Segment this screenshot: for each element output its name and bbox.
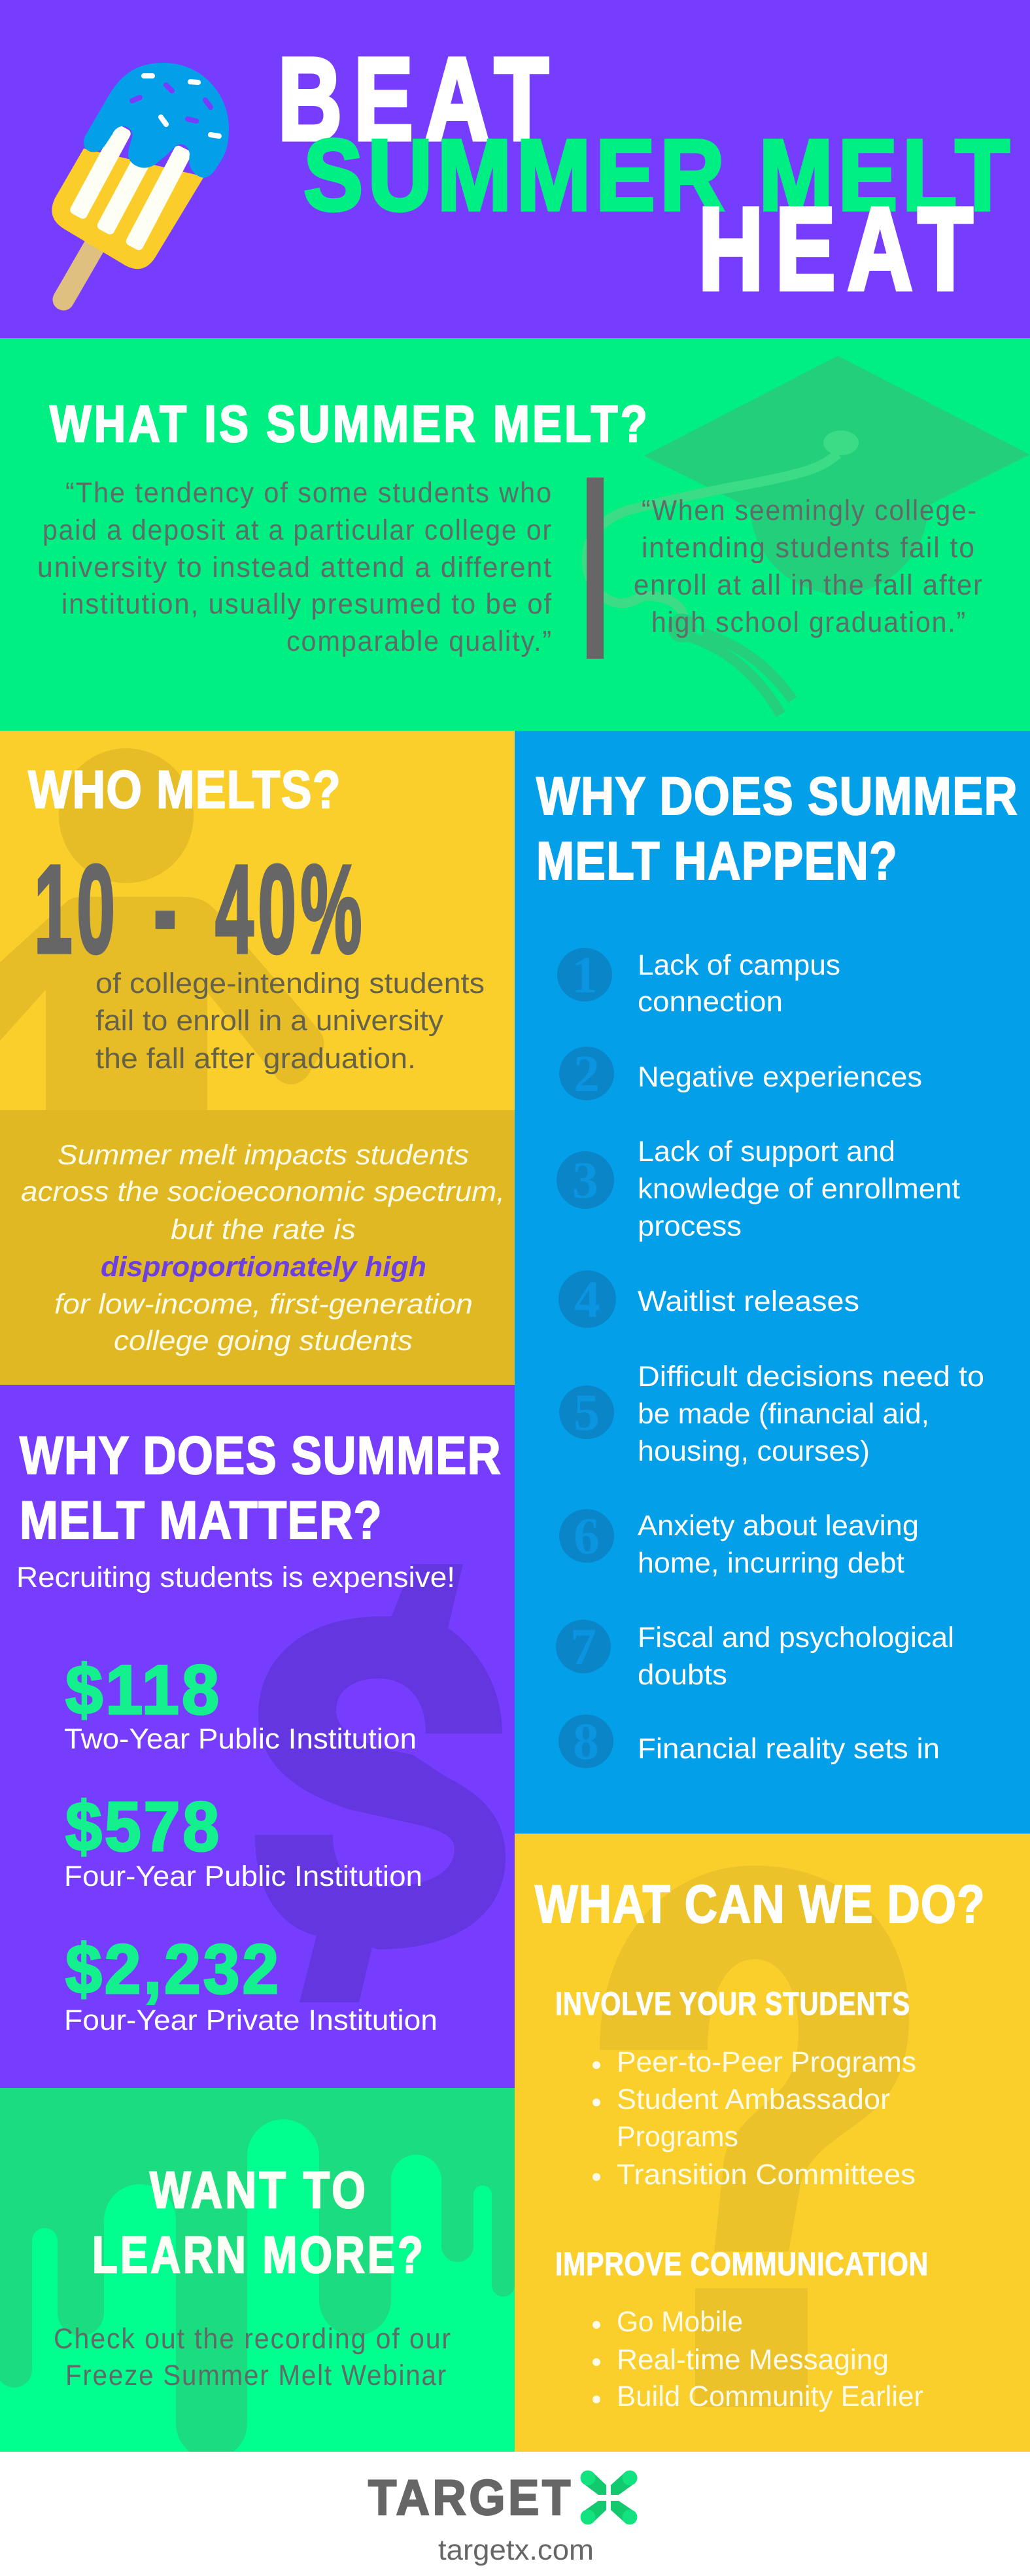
- icon: dollar sign watermark: [255, 1564, 506, 2002]
- list item 3: process: [638, 1210, 742, 1242]
- subheading: involve your students: INVOLVE YOUR STUDENTS: [555, 1985, 910, 2022]
- panel: why does summer melt matter: [0, 1385, 515, 2088]
- list item 3: knowledge of enrollment: [638, 1173, 960, 1205]
- list item 7: 7: [570, 1618, 596, 1676]
- heading: why does summer melt happen: MELT HAPPEN?: [536, 831, 898, 891]
- list item 8: [558, 1713, 940, 1771]
- quote: right definition: intending students fail to: [642, 532, 976, 564]
- list item 4: Waitlist releases: [638, 1285, 859, 1317]
- text: impact callout: for low-income, first-generation: [54, 1289, 473, 1320]
- text: webinar prompt: Check out the recording of our: [54, 2323, 452, 2355]
- list item 2: [559, 1045, 922, 1103]
- list item 4: 4: [574, 1271, 600, 1329]
- title: beat: BEAT: [278, 33, 560, 164]
- list item 8: 8: [573, 1713, 599, 1771]
- text: stat description: fail to enroll in a university: [95, 1005, 443, 1037]
- list item 7: Fiscal and psychological: [638, 1622, 954, 1654]
- list: involve students: Student Ambassador: [617, 2083, 890, 2115]
- icon: targetx X logo: [581, 2470, 637, 2525]
- panel: who melts: [0, 731, 515, 1385]
- list item 8: Financial reality sets in: [638, 1733, 940, 1765]
- icon: graduation cap watermark: [587, 356, 1030, 714]
- quote: left definition: university to instead attend a different: [37, 551, 553, 583]
- text: website: targetx.com: [438, 2534, 594, 2566]
- list item 6: home, incurring debt: [638, 1547, 904, 1579]
- list item 6: 6: [574, 1508, 600, 1565]
- list: involve students: Peer-to-Peer Programs: [617, 2046, 916, 2078]
- list: improve communication: Real-time Messaging: [617, 2344, 889, 2376]
- stat: four-year public: [64, 1787, 422, 1892]
- panel: title header: [0, 0, 1030, 338]
- icon: person watermark: [0, 748, 324, 1110]
- quote: right definition: enroll at all in the fall after: [634, 569, 984, 601]
- heading: why does summer melt matter: WHY DOES SUMMER: [20, 1426, 502, 1486]
- text: webinar prompt: [54, 2323, 452, 2392]
- list: involve students: Programs: [617, 2121, 738, 2153]
- drips background: [0, 2119, 515, 2460]
- list: involve students: [592, 2046, 916, 2191]
- quote: right definition: [634, 495, 984, 638]
- list item 5: [559, 1361, 984, 1467]
- text: stat description: the fall after graduation.: [95, 1043, 416, 1075]
- divider bar: [587, 478, 604, 659]
- heading: why does summer melt happen: [536, 767, 1018, 891]
- band: dark yellow callout: [0, 1110, 515, 1385]
- stat: two-year public: $118: [65, 1650, 222, 1729]
- stat: two-year public: Two-Year Public Institution: [64, 1723, 417, 1755]
- heading: want to learn more: LEARN MORE?: [92, 2225, 426, 2284]
- list item 5: housing, courses): [638, 1435, 870, 1467]
- list item 5: Difficult decisions need to: [638, 1361, 984, 1393]
- heading: what is summer melt: WHAT IS SUMMER MELT?: [50, 394, 650, 453]
- panel: what is summer melt: [0, 338, 1030, 731]
- list item 2: Negative experiences: [638, 1061, 922, 1093]
- list item 1: 1: [572, 947, 598, 1004]
- panel: what can we do: [515, 1834, 1030, 2452]
- stat: two-year public: [64, 1650, 417, 1755]
- heading: want to learn more: [92, 2161, 426, 2284]
- list: improve communication: Go Mobile: [617, 2306, 743, 2338]
- quote: right definition: “When seemingly college-: [642, 495, 978, 527]
- text: stat description: [95, 967, 485, 1075]
- list item 3: 3: [572, 1152, 598, 1210]
- text: stat description: of college-intending students: [95, 967, 485, 1000]
- list item 1: connection: [638, 986, 783, 1018]
- quote: left definition: “The tendency of some students who: [65, 477, 553, 509]
- quote: left definition: comparable quality.”: [286, 625, 553, 657]
- icon: melting popsicle: [52, 63, 229, 300]
- text: impact callout: disproportionately high: [101, 1251, 426, 1283]
- quote: right definition: high school graduation.”: [651, 606, 967, 638]
- text: impact callout: college going students: [114, 1325, 413, 1357]
- list: improve communication: Build Community Earlier: [617, 2380, 923, 2412]
- list item 7: doubts: [638, 1659, 727, 1691]
- panel: want to learn more: [0, 2088, 515, 2460]
- list item 3: Lack of support and: [638, 1136, 895, 1168]
- heading: who melts: WHO MELTS?: [28, 760, 341, 820]
- quote: left definition: institution, usually presumed to be of: [61, 588, 553, 620]
- list item 4: [558, 1270, 859, 1329]
- stat: four-year public: $578: [65, 1787, 222, 1866]
- icon: question mark watermark: [600, 1866, 909, 2407]
- subheading: improve communication: IMPROVE COMMUNICATION: [555, 2246, 929, 2282]
- heading: want to learn more: WANT TO: [150, 2161, 368, 2219]
- logo wordmark: target: TARGET: [368, 2470, 574, 2526]
- heading: why does summer melt matter: [20, 1426, 502, 1550]
- list: involve students: Transition Committees: [617, 2159, 916, 2191]
- stat: four-year private: Four-Year Private Institution: [64, 2004, 438, 2036]
- text: webinar prompt: Freeze Summer Melt Webinar: [65, 2359, 447, 2392]
- list item 2: 2: [574, 1045, 600, 1103]
- list item 1: Lack of campus: [638, 949, 840, 981]
- panel: footer: [0, 2452, 1030, 2576]
- stat: four-year private: [64, 1930, 438, 2036]
- text: impact callout: across the socioeconomic spectrum,: [21, 1176, 505, 1208]
- list item 7: [556, 1618, 954, 1691]
- list item 6: Anxiety about leaving: [638, 1510, 919, 1542]
- list item 5: be made (financial aid,: [638, 1398, 929, 1430]
- stat: four-year private: $2,232: [65, 1930, 281, 2008]
- panel: why does summer melt happen: [515, 731, 1030, 1834]
- text: impact callout: but the rate is: [171, 1214, 356, 1245]
- list item 5: 5: [574, 1384, 600, 1442]
- list item 1: [557, 947, 840, 1018]
- quote: left definition: paid a deposit at a particular college or: [43, 514, 553, 546]
- list: improve communication: [592, 2306, 923, 2412]
- stat: 10 to 40 percent: 10 - 40%: [34, 839, 366, 979]
- stat: four-year public: Four-Year Public Institution: [64, 1860, 422, 1892]
- text: recruiting is expensive: Recruiting students is expensive!: [16, 1561, 455, 1593]
- list item 6: [559, 1508, 919, 1579]
- text: impact callout: [21, 1140, 505, 1357]
- heading: why does summer melt matter: MELT MATTER?: [20, 1491, 383, 1550]
- text: impact callout: Summer melt impacts students: [58, 1140, 469, 1171]
- quote: left definition: [37, 477, 553, 657]
- list item 3: [557, 1136, 960, 1242]
